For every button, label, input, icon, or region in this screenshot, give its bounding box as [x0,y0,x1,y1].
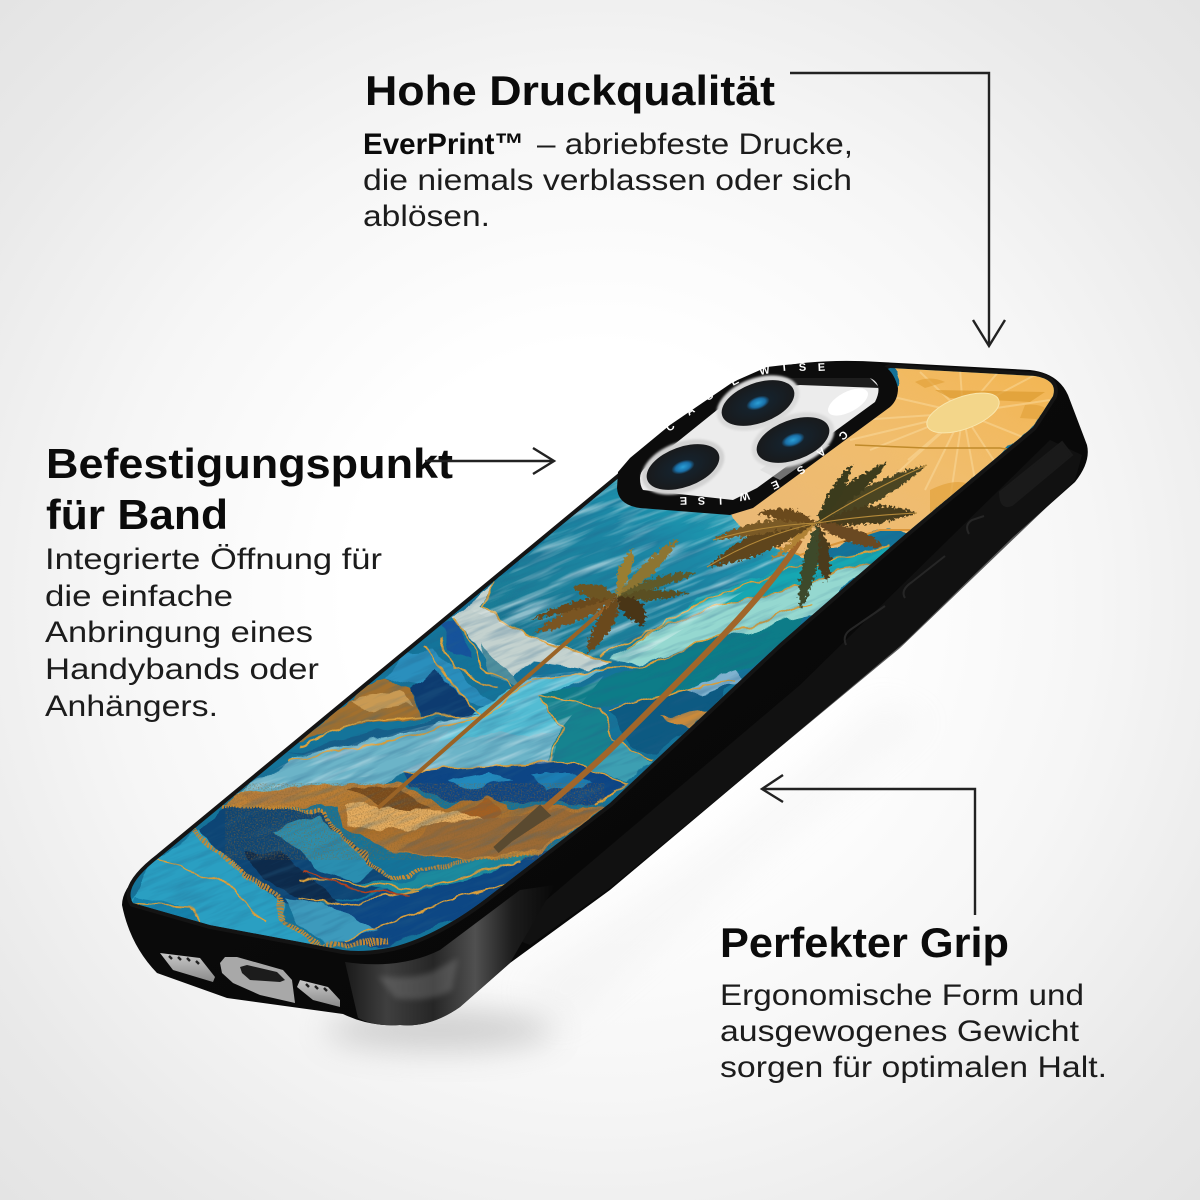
left rock [296,677,420,742]
trunk [378,602,612,808]
lower body light blue [130,830,325,950]
marble regions [130,470,890,950]
lower left streak band [236,668,610,792]
pale grey stone [453,583,613,680]
fronds [707,463,927,610]
lens lower left [634,429,732,505]
glass opening [640,378,879,500]
darker band behind sun [935,390,1045,402]
case body [122,361,1088,1025]
body text: die niemals verblassen oder sich [363,164,852,197]
marble ripple texture [474,479,788,663]
highlight [824,383,872,421]
volume up [904,556,945,598]
top inner bevel [760,378,880,390]
body text: die einfache [45,580,233,613]
camera island [617,362,898,515]
shadow under phone [325,700,930,1050]
body text: Anbringung eines [45,616,313,649]
body text: Anhängers. [45,690,218,723]
volume down [845,606,885,645]
glitter veins [193,830,387,947]
left speaker [160,953,215,982]
large palm tree [496,463,927,850]
sun disc [926,392,1000,434]
arrow to top edge [790,73,1005,346]
blue lower right [610,684,732,755]
upper teal marble [486,479,805,661]
side buttons [845,442,1072,645]
body text [45,543,382,723]
side grip sheen [505,440,1082,945]
body text [720,979,1107,1084]
pale aqua band [609,564,869,666]
arrow to strap point [425,448,554,474]
small palm tree [378,538,697,808]
deep core [245,850,345,905]
heading: Perfekter Grip [720,919,1009,966]
trunk [542,540,802,810]
teal lower center [538,696,612,766]
bottom corner gloss [345,885,555,1025]
action button [967,516,984,534]
dune grain [225,783,605,860]
callout: strap attachment [45,440,554,723]
brand text top: CASEWISE [664,362,825,434]
phone case [122,360,1088,1026]
gold edge of sand [745,530,910,555]
body text: Integrierte Öffnung für [45,543,382,576]
body text: Ergonomische Form und [720,979,1084,1012]
sand sky [727,362,1060,555]
right lower blue [327,850,548,948]
heading: Befestigungspunkt [46,440,453,487]
right speaker [297,980,340,1007]
lens right [744,402,842,478]
body text: EverPrint™ [363,128,524,161]
navy central [200,808,395,905]
inner rim of case [131,368,1054,951]
heading: Hohe Druckqualität [365,67,775,114]
frond midribs [707,465,927,567]
dark vein texture [137,487,881,948]
bright teal band [620,545,890,655]
body text: Handybands oder [45,653,319,686]
gold splashes [915,378,1050,520]
highlight on corner [378,958,458,999]
swirl teal [270,815,375,880]
callout: print quality [363,67,1005,346]
heading: für Band [46,491,228,538]
lens top [709,365,807,441]
blue shard near edge [440,620,470,660]
power button [1000,442,1072,506]
body text: sorgen für optimalen Halt. [720,1051,1107,1084]
navy patch [410,669,476,718]
callout: perfect grip [720,775,1107,1084]
thin gold line [855,444,1008,450]
orange scrap [660,710,712,728]
heading [46,440,453,538]
usb port [220,957,295,1003]
island frame [617,362,898,515]
streak texture [244,669,604,790]
arrow to side of case [762,775,975,915]
sun rays [850,368,1050,500]
navy above dunes [403,762,625,804]
body text [363,128,853,233]
fronds [530,538,697,653]
sand dunes [225,783,605,860]
dark teal band [540,618,802,708]
body text: ausgewogenes Gewicht [720,1015,1080,1048]
brand text bottom: CASEWISE [680,428,850,506]
charging ports [160,953,340,1007]
body text: ablösen. [363,200,490,233]
body text: – abriebfeste Drucke, [537,128,853,161]
printed artwork [130,368,1054,951]
